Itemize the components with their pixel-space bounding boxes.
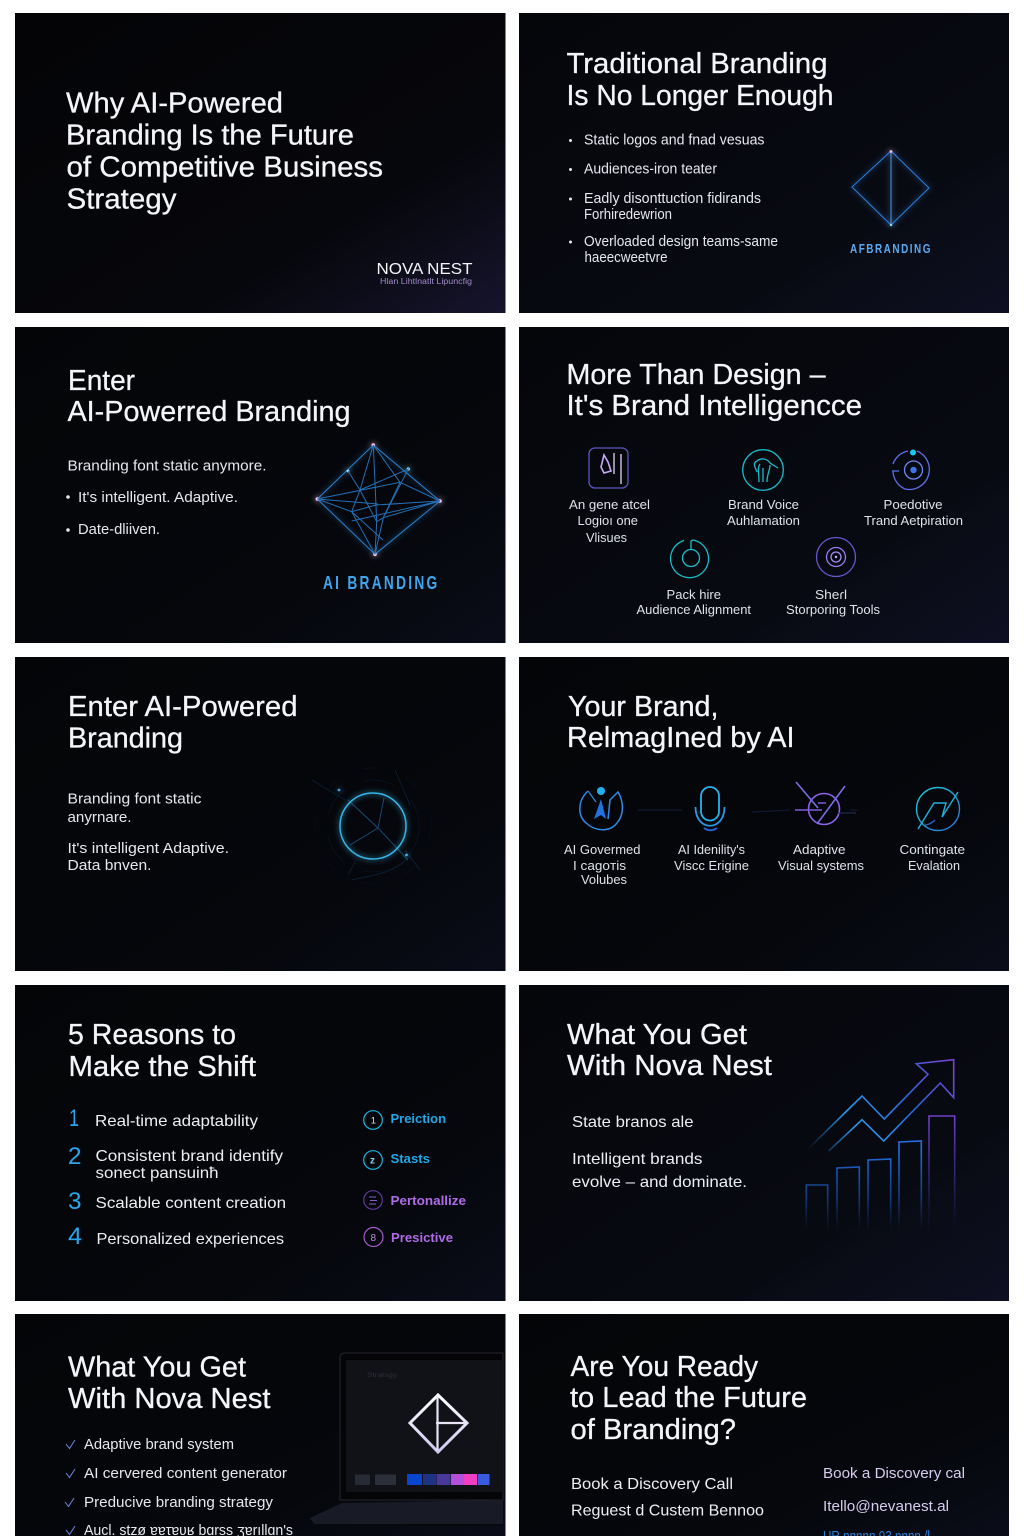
icon: brand voice [743,450,783,490]
heading: Branding [68,722,183,754]
label: audience alignment: Audience Alignment [636,603,752,617]
icon: microphone [696,787,724,830]
panel: title slide [15,13,506,313]
label: supporting tools [786,588,880,617]
heading: What You Get [567,1019,747,1051]
icon: predictive trend [892,450,929,489]
panel: your brand reimagined [519,657,1009,971]
body text [572,1114,747,1191]
heading [68,365,350,428]
heading: of Branding? [570,1414,736,1446]
heading: to Lead the Future [570,1382,807,1414]
body text [66,458,266,538]
label: AI branding: AI BRANDING [323,573,440,593]
label: generated logos: Logioı one [578,514,638,528]
heading: It's Brand Intelligencce [566,390,862,422]
panel background [15,13,506,313]
arrow [809,1060,954,1151]
heading [68,1019,256,1083]
panel: what you get, chart [519,985,1009,1301]
label: generated logos: Vlisues [586,531,627,545]
numbered list: Personalized experiences [96,1231,284,1248]
heading: RelmagIned by AI [567,722,794,754]
panel background [519,657,1009,971]
contact details: Itello@nevanest.al [823,1498,949,1515]
icon: supporting tools [816,538,856,576]
label: continuous evaluation [900,843,965,873]
checklist [65,1437,293,1536]
body text: It's intelligent Adaptive. [68,841,229,857]
label: brand voice [727,498,800,528]
label: AI governed: AI Govermed [564,843,641,857]
title [66,88,383,216]
legend: predictive: 8 [370,1233,376,1244]
legend: predictive: Presictive [391,1231,453,1245]
heading: What You Get [68,1352,246,1384]
bullet list: haeecweetvre [584,250,668,266]
bullet list: Overloaded design teams-same [584,234,778,250]
title: Why AI-Powered [66,88,283,120]
label: brand voice: Brand Voice [728,498,799,512]
title: Branding Is the Future [66,120,354,152]
icon: adaptive visuals [795,782,856,824]
colour swatches [355,1474,490,1485]
heading [567,1019,772,1082]
panel background [15,327,506,643]
panel: what you get, laptop [15,1314,506,1536]
numbered list: 4 [68,1223,82,1250]
body text: It's intelligent. Adaptive. [78,490,238,506]
bullet list [569,132,778,266]
numbered list: Real-time adaptability [95,1113,258,1130]
panel background [15,1314,506,1536]
call to action links: Book a Discovery Call [571,1476,733,1493]
bar chart with arrow [806,1060,955,1232]
numbered list: 3 [68,1188,82,1215]
logo: Nova Nest: Hlan Lihtlnatlt Lipuncfig [380,277,472,286]
heading: Are You Ready [570,1351,758,1383]
label: predictive trend: Poedotive [884,498,943,512]
legend: personalize: Pertonallize [390,1194,466,1208]
panel: brand intelligence [519,327,1009,643]
heading: Enter [68,365,135,397]
panel: 5 reasons [15,985,506,1301]
label: generated logos [569,498,650,545]
label: predictive trend: Trand Aetpiration [864,514,963,528]
checklist: AI cervered content generator [84,1466,287,1482]
panel background [15,985,506,1301]
panel: enter AI-powered branding [15,327,506,643]
label: AI governed: Volubes [581,873,627,887]
heading: Is No Longer Enough [566,80,834,112]
numbered list: Consistent brand identify [96,1148,283,1165]
legend: stats: Stasts [390,1152,430,1166]
heading: Your Brand, [568,691,718,723]
call to action links [571,1476,764,1520]
heading [570,1351,807,1446]
panel background [15,657,506,971]
body text: Intelligent brands [572,1151,702,1168]
legend: stats [364,1151,430,1169]
numbered list: sonect pansuinħ [96,1165,218,1182]
heading: Traditional Branding [566,48,828,80]
label: continuous evaluation: Contingate [900,843,965,857]
label: adaptive visuals: Visual systems [778,859,864,873]
laptop mockup [310,1353,503,1526]
panel background [519,985,1009,1301]
body text: Date-dliiven. [78,522,160,538]
bullet list: Static logos and fnad vesuas [584,132,764,148]
label: supporting tools: Storporing Tools [786,603,880,617]
legend: personalize [364,1191,466,1209]
body text [68,792,229,874]
heading: More Than Design – [566,359,826,391]
heading: Enter AI-Powered [68,691,298,723]
heading [566,48,834,112]
heading [68,1352,270,1415]
body text: Branding font static [68,792,202,808]
panel: traditional branding [519,13,1009,313]
heading: AI-Powerred Branding [68,396,350,428]
heading: Make the Shift [68,1051,256,1083]
logo: Nova Nest [376,261,473,286]
title: Strategy [66,184,177,216]
legend: prediction: 1 [371,1116,376,1126]
icon: continuous evaluation [916,788,960,830]
icon: glowing ring [312,768,431,884]
label: voice engine [674,843,749,873]
bullet list: Eadly disonttuction fidirands [584,191,761,207]
label: voice engine: Viscc Erigine [674,859,749,873]
panel background [519,327,1009,643]
heading: 5 Reasons to [68,1019,236,1051]
icon: glowing diamond [852,150,929,226]
numbered list: Scalable content creation [96,1195,286,1212]
icon: logo visuals [589,448,628,488]
label: brand voice: Auhlamation [727,514,800,528]
logo: Nova Nest: NOVA NEST [376,261,473,278]
panel background [519,13,1009,313]
label: voice engine: AI Idenility's [678,843,745,857]
label: adaptive visuals [778,843,864,873]
contact details [823,1465,965,1536]
body text: State branos ale [572,1114,694,1131]
title: of Competitive Business [66,152,383,184]
body text: evolve – and dominate. [572,1174,747,1191]
legend: prediction [364,1111,446,1129]
heading [566,359,862,422]
label: adaptive visuals: Adaptive [793,843,846,857]
icon: network diamond [316,443,442,556]
heading [567,691,794,754]
logo diamond on screen [410,1395,467,1452]
panel: call to action [519,1314,1009,1536]
numbered list: 1 [69,1105,79,1132]
panel: enter AI-powered branding, ring version [15,657,506,971]
checklist: Preducive branding strategy [84,1495,274,1511]
legend: prediction: Preiction [390,1112,446,1126]
panel background [519,1314,1009,1536]
icon: AI governed [580,787,622,830]
label: audience alignment: Pack hire [666,588,721,602]
contact details: Book a Discovery cal [823,1465,965,1482]
checklist: Adaptive brand system [84,1437,234,1453]
label: generated logos: An gene atcel [569,498,650,512]
heading [68,691,298,754]
body text: Data bnven. [68,858,152,874]
icon: audience alignment [671,540,709,578]
label: AI governed: I cagoтis [573,859,626,873]
numbered list [68,1105,286,1250]
numbered list: 2 [68,1143,82,1170]
label: AF branding: AFBRANDING [850,241,932,256]
label: audience alignment [636,588,752,617]
legend: stats: z [370,1156,375,1166]
body text: Branding font static anymore. [68,458,266,474]
call to action links: Reguest d Custem Bennoo [571,1503,764,1520]
label: AI governed [564,843,641,887]
body text: anyrnare. [68,810,132,826]
heading: With Nova Nest [567,1050,772,1082]
bullet list: Forhiredewrion [584,207,672,223]
heading: With Nova Nest [68,1383,270,1415]
bullet list: Audiences-iron teater [584,162,717,178]
legend: predictive [364,1228,453,1246]
label: continuous evaluation: Evalation [908,859,960,873]
laptop mockup: Stratsgy [367,1373,397,1379]
label: predictive trend [864,498,963,528]
connector lines [638,810,858,812]
label: supporting tools: Sheɾl [815,588,847,602]
